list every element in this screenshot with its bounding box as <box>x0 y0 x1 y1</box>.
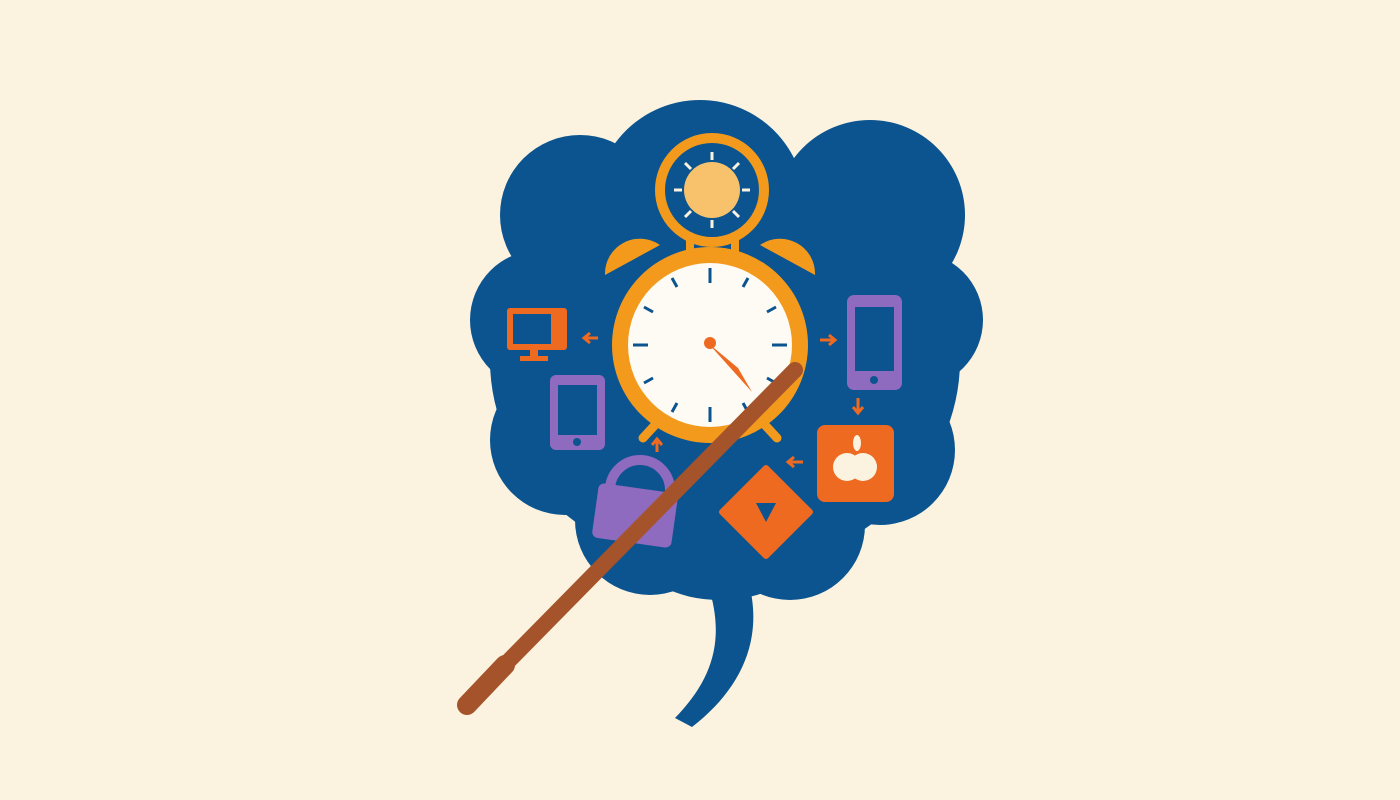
arrow: down <box>853 398 863 413</box>
sun ring on top <box>660 138 764 255</box>
icon: lock <box>591 460 678 548</box>
arrow: phone <box>820 335 835 345</box>
icon: apple app <box>817 425 894 502</box>
icon: tablet <box>550 375 605 450</box>
bells <box>605 239 660 275</box>
stick <box>467 370 795 705</box>
arrow: up <box>652 439 662 452</box>
arrow: left <box>788 457 803 467</box>
legs <box>643 425 777 438</box>
cloud: blue thought bubble <box>470 100 983 727</box>
icon: phone <box>847 295 902 390</box>
icon: alarm clock <box>605 138 815 443</box>
icon: play diamond <box>722 468 810 556</box>
arrow: monitor <box>584 333 598 343</box>
icon: monitor <box>507 308 567 361</box>
